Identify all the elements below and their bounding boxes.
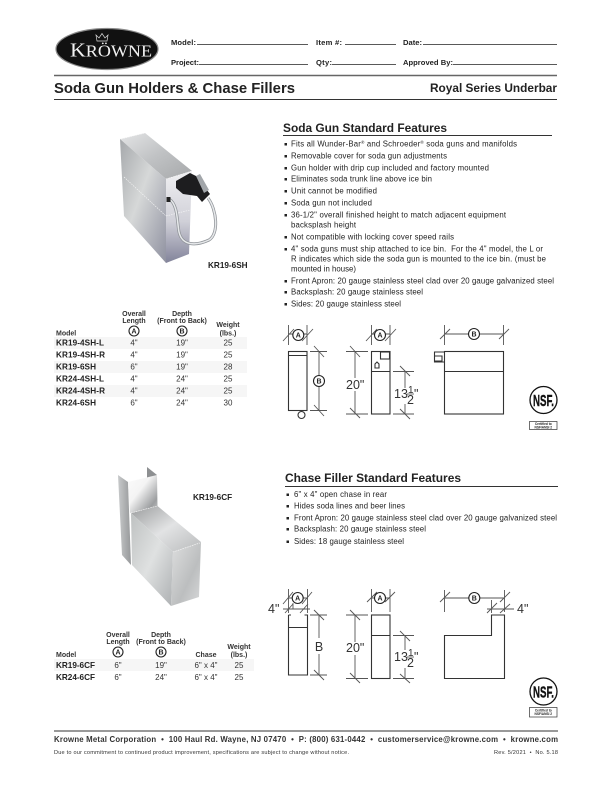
table: soda gun models: 24" [176, 398, 188, 408]
list: soda gun features: and Schroeder [365, 140, 421, 148]
list: chase filler features: 6" x 4" open chase in rear [294, 490, 387, 499]
table: chase filler models: Length [106, 639, 130, 646]
header form fields: Qty: [316, 58, 332, 67]
table: chase filler models: KR19-6CF [56, 661, 95, 670]
drawing: soda gun top view [434, 325, 509, 414]
footer: disclaimer: Due to our commitment to continued product improvement, specifications are subject to change without notice. [54, 750, 349, 756]
table: chase filler models: (Front to Back) [136, 639, 186, 646]
table: soda gun models: 25 [224, 386, 233, 396]
drawing: chase filler top view [440, 590, 528, 678]
list: soda gun features [284, 139, 554, 308]
list: soda gun features: ® [361, 139, 365, 145]
table: soda gun models: B [179, 328, 185, 336]
table: soda gun models: 6" [130, 398, 138, 408]
table: soda gun models: Model [56, 330, 76, 338]
table: chase filler models: Overall [106, 632, 130, 639]
header form fields: Project: [171, 58, 199, 67]
photo: chase filler KR19-6CF [118, 467, 232, 606]
table: soda gun models: 24" [176, 374, 188, 384]
list: chase filler features: Sides: 18 gauge stainless steel [294, 537, 404, 546]
drawing: soda gun side view: " [414, 387, 418, 401]
table: soda gun models: 25 [224, 350, 233, 360]
table: soda gun models: 4" [130, 374, 138, 384]
heading: soda gun features: Soda Gun Standard Features [283, 121, 447, 135]
drawing: soda gun side view [345, 325, 419, 419]
table: chase filler models: B [158, 650, 164, 656]
table: soda gun models: 25 [224, 338, 233, 348]
drawing: chase filler side view: 20" [346, 641, 364, 655]
footer: revision: Rev. 5/2021 • No. 5.18 [494, 750, 558, 756]
table: soda gun models: KR19-4SH-R [56, 350, 105, 360]
header form fields: Date: [403, 38, 422, 47]
drawing: soda gun front view: B [316, 378, 322, 386]
list: soda gun features: Soda gun not included [291, 198, 372, 208]
photo: soda gun holder KR19-6SH [120, 133, 248, 270]
footer: contact line: Krowne Metal Corporation • 100 Haul Rd. Wayne, NJ 07470 • P: (800) 631-0442 • customerservice@krowne.com • krowne.com [54, 735, 558, 744]
drawing: soda gun side view: 20" [346, 378, 364, 392]
table: soda gun models: KR19-4SH-L [56, 338, 104, 348]
drawing: chase filler side view: 1 [408, 648, 414, 659]
table: chase filler models: 24" [155, 673, 167, 682]
table: soda gun models: KR24-4SH-L [56, 374, 104, 384]
table: soda gun models: A [131, 328, 137, 336]
drawing: soda gun side view: 1 [408, 385, 414, 396]
table: soda gun models: (lbs.) [220, 330, 236, 338]
list: soda gun features: 4" soda guns must ship attached to ice bin. For the 4" model, the L or [291, 244, 543, 254]
table: chase filler models: 6" x 4" [194, 673, 218, 682]
header form fields: Model: [171, 38, 196, 47]
header form fields: Approved By: [403, 58, 453, 67]
list: soda gun features: soda guns and manifolds [424, 140, 517, 148]
list: chase filler features: Front Apron: 20 gauge stainless steel clad over 20 gauge galvanized steel [294, 514, 557, 522]
table: chase filler models: 19" [155, 661, 167, 670]
table: soda gun models: 25 [224, 374, 233, 384]
table: chase filler models: (lbs.) [231, 652, 247, 659]
table: soda gun models: 19" [176, 362, 188, 372]
table: soda gun models: 6" [130, 362, 138, 372]
drawing: chase filler front view: 4" [268, 602, 279, 616]
list: soda gun features: Sides: 20 gauge stainless steel [291, 300, 401, 308]
drawing: chase filler side view: A [377, 596, 383, 602]
list: soda gun features: R indicates which side the soda gun is mounted to the ice bin. (must be [291, 254, 546, 264]
table: soda gun models: Depth [172, 311, 192, 318]
icon: NSF certification chase filler: NSF/ANSI 2 [535, 712, 552, 716]
icon: NSF certification: NSF. [533, 393, 554, 410]
list: soda gun features: Fits all Wunder-Bar [291, 140, 361, 148]
subtitle: series: Royal Series Underbar [430, 82, 557, 95]
label: KR19-6SH: KR19-6SH [208, 261, 248, 270]
logo: Krowne [56, 28, 158, 70]
table: soda gun models: Weight [216, 322, 240, 329]
table: chase filler models [54, 632, 254, 682]
table: soda gun models: 24" [176, 386, 188, 396]
list: chase filler features: Backsplash: 20 gauge stainless steel [294, 524, 426, 534]
heading: chase filler features: Chase Filler Standard Features [285, 471, 461, 485]
table: chase filler models: Model [56, 652, 76, 659]
drawing: soda gun front view: A [296, 332, 301, 340]
table: soda gun models: KR19-6SH [56, 362, 96, 372]
table: soda gun models: 19" [176, 350, 188, 360]
table: chase filler models: 6" x 4" [194, 661, 218, 670]
list: soda gun features: ® [420, 139, 424, 145]
drawing: chase filler top view: B [472, 596, 477, 602]
table: chase filler models: 25 [235, 673, 244, 682]
table: chase filler models: 6" [114, 673, 122, 682]
list: soda gun features: Removable cover for soda gun adjustments [291, 152, 447, 160]
table: soda gun models: KR24-4SH-R [56, 386, 105, 396]
table: chase filler models: Depth [151, 632, 171, 639]
drawing: chase filler front view: B [315, 640, 323, 654]
list: soda gun features: Backsplash: 20 gauge stainless steel [291, 288, 423, 296]
table: chase filler models: A [115, 650, 121, 656]
table: chase filler models: Chase [195, 652, 217, 659]
list: soda gun features: mounted in house) [291, 264, 356, 274]
drawing: chase filler side view: 13 [394, 650, 408, 664]
icon: NSF certification: Certified to [535, 422, 552, 426]
list: chase filler features: Hides soda lines and beer lines [294, 502, 405, 510]
table: soda gun models: (Front to Back) [157, 318, 207, 325]
table: soda gun models: 4" [130, 338, 138, 348]
list: chase filler features [286, 490, 557, 546]
table: chase filler models: Weight [227, 644, 251, 651]
table: soda gun models: Length [122, 318, 146, 325]
list: soda gun features: 36-1/2" overall finished height to match adjacent equipment [291, 210, 507, 220]
drawing: soda gun side view: 2 [407, 393, 414, 407]
table: soda gun models: 19" [176, 338, 188, 348]
list: soda gun features: Unit cannot be modified [291, 186, 377, 196]
logo: Krowne: KRÖWNE [70, 40, 152, 62]
icon: NSF certification chase filler: Certified to [535, 708, 552, 712]
icon: NSF certification chase filler: NSF. [533, 684, 554, 702]
table: soda gun models: Overall [122, 311, 146, 318]
drawing: chase filler top view: 4" [517, 602, 528, 616]
header form fields: Item #: [316, 38, 342, 47]
drawing: chase filler front view: A [295, 596, 300, 602]
table: chase filler models: KR24-6CF [56, 673, 95, 682]
title: Soda Gun Holders & Chase Fillers [54, 80, 295, 97]
drawing: soda gun top view: B [471, 332, 477, 338]
table: soda gun models: 30 [224, 398, 233, 408]
table: soda gun models: 4" [130, 350, 138, 360]
table: soda gun models: KR24-6SH [56, 398, 96, 408]
label: KR19-6CF: KR19-6CF [193, 493, 232, 502]
icon: NSF certification chase filler [530, 678, 557, 717]
drawing: chase filler side view: " [414, 650, 418, 664]
table: chase filler models: 25 [235, 661, 244, 670]
list: soda gun features: backsplash height [291, 220, 357, 230]
header form fields [171, 38, 557, 67]
list: soda gun features: Gun holder with drip cup included and factory mounted [291, 164, 489, 172]
table: chase filler models: 6" [114, 661, 122, 670]
drawing: soda gun side view: A [377, 332, 383, 340]
drawing: soda gun side view: 13 [394, 387, 408, 401]
table: soda gun models [54, 311, 247, 408]
drawing: chase filler front view [268, 589, 327, 680]
drawing: soda gun front view [283, 325, 327, 418]
table: soda gun models: 28 [224, 362, 233, 372]
drawing: chase filler side view [345, 589, 419, 683]
icon: NSF certification: NSF/ANSI 2 [535, 425, 552, 429]
list: soda gun features: Front Apron: 20 gauge stainless steel clad over 20 gauge galvanized steel [291, 276, 554, 286]
icon: NSF certification [530, 386, 557, 430]
drawing: chase filler side view: 2 [407, 656, 414, 670]
table: soda gun models: 4" [130, 386, 138, 396]
list: soda gun features: Not compatible with locking cover speed rails [291, 232, 454, 242]
list: soda gun features: Eliminates soda trunk line above ice bin [291, 174, 432, 184]
